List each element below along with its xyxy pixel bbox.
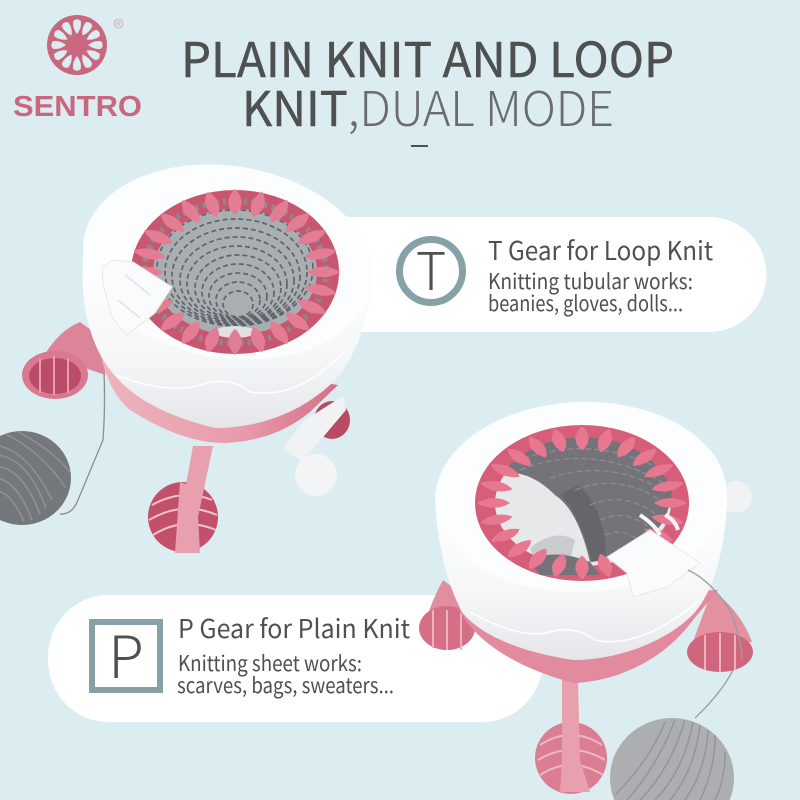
- seam line: [470, 600, 700, 642]
- panel description: [177, 647, 394, 700]
- logo: Sentro: [13, 15, 142, 123]
- panel heading: P Gear for Plain Knit: [178, 609, 410, 646]
- crank handle with ball: [283, 396, 346, 496]
- body: white side: [83, 245, 372, 428]
- ring teeth: [477, 426, 687, 580]
- title dash: [411, 145, 428, 147]
- panel description: [488, 265, 693, 318]
- panel background: [300, 217, 766, 332]
- body: white side: [435, 495, 727, 660]
- carriage: [607, 515, 700, 597]
- seam line: [115, 350, 345, 393]
- icon: P in square: [92, 611, 160, 695]
- body: pink base: [455, 590, 718, 683]
- panel description: beanies, gloves, dolls...: [488, 287, 683, 318]
- knob ball: [720, 481, 752, 513]
- body: white top: [432, 397, 730, 597]
- panel heading: T Gear for Loop Knit: [488, 231, 713, 268]
- body: white top: [69, 144, 387, 380]
- body: pink base: [100, 350, 338, 443]
- carriage: [102, 260, 172, 335]
- panel: P gear for plain knit: [48, 595, 543, 722]
- panel: T gear for loop knit: [300, 217, 766, 332]
- panel background: [48, 595, 543, 722]
- loom: P gear (lower right): [419, 397, 753, 794]
- title line 2: KNIT,DUAL MODE: [242, 70, 614, 140]
- ring teeth: [130, 189, 340, 355]
- leg and foot: left: [419, 580, 475, 650]
- icon: T in circle: T: [416, 230, 446, 305]
- icon: T in circle: [400, 230, 462, 305]
- leg and foot: right: [687, 590, 753, 672]
- panel description: scarves, bags, sweaters...: [177, 669, 394, 700]
- yarn ball: dark gray: [0, 326, 116, 525]
- yarn ball: light gray: [610, 660, 738, 800]
- knit fabric and opening: [475, 425, 689, 581]
- thread: [688, 570, 742, 660]
- leg and foot: right: [314, 401, 350, 439]
- leg and foot: bottom: [535, 680, 607, 794]
- panel description: Knitting tubular works:: [488, 265, 693, 296]
- brand name: SENTRO: [13, 91, 142, 123]
- loom: T gear (upper left): [22, 144, 387, 553]
- knit fabric: gray cone: [131, 190, 339, 354]
- panel description: Knitting sheet works:: [178, 647, 362, 678]
- leg and foot: bottom: [148, 446, 218, 553]
- title line 1: PLAIN KNIT AND LOOP: [181, 21, 674, 91]
- registered mark: R: [116, 21, 121, 28]
- icon: P in square: P: [108, 611, 144, 695]
- leg and foot: left: [22, 322, 105, 399]
- title: [181, 21, 674, 147]
- logo wheel icon: [47, 15, 107, 75]
